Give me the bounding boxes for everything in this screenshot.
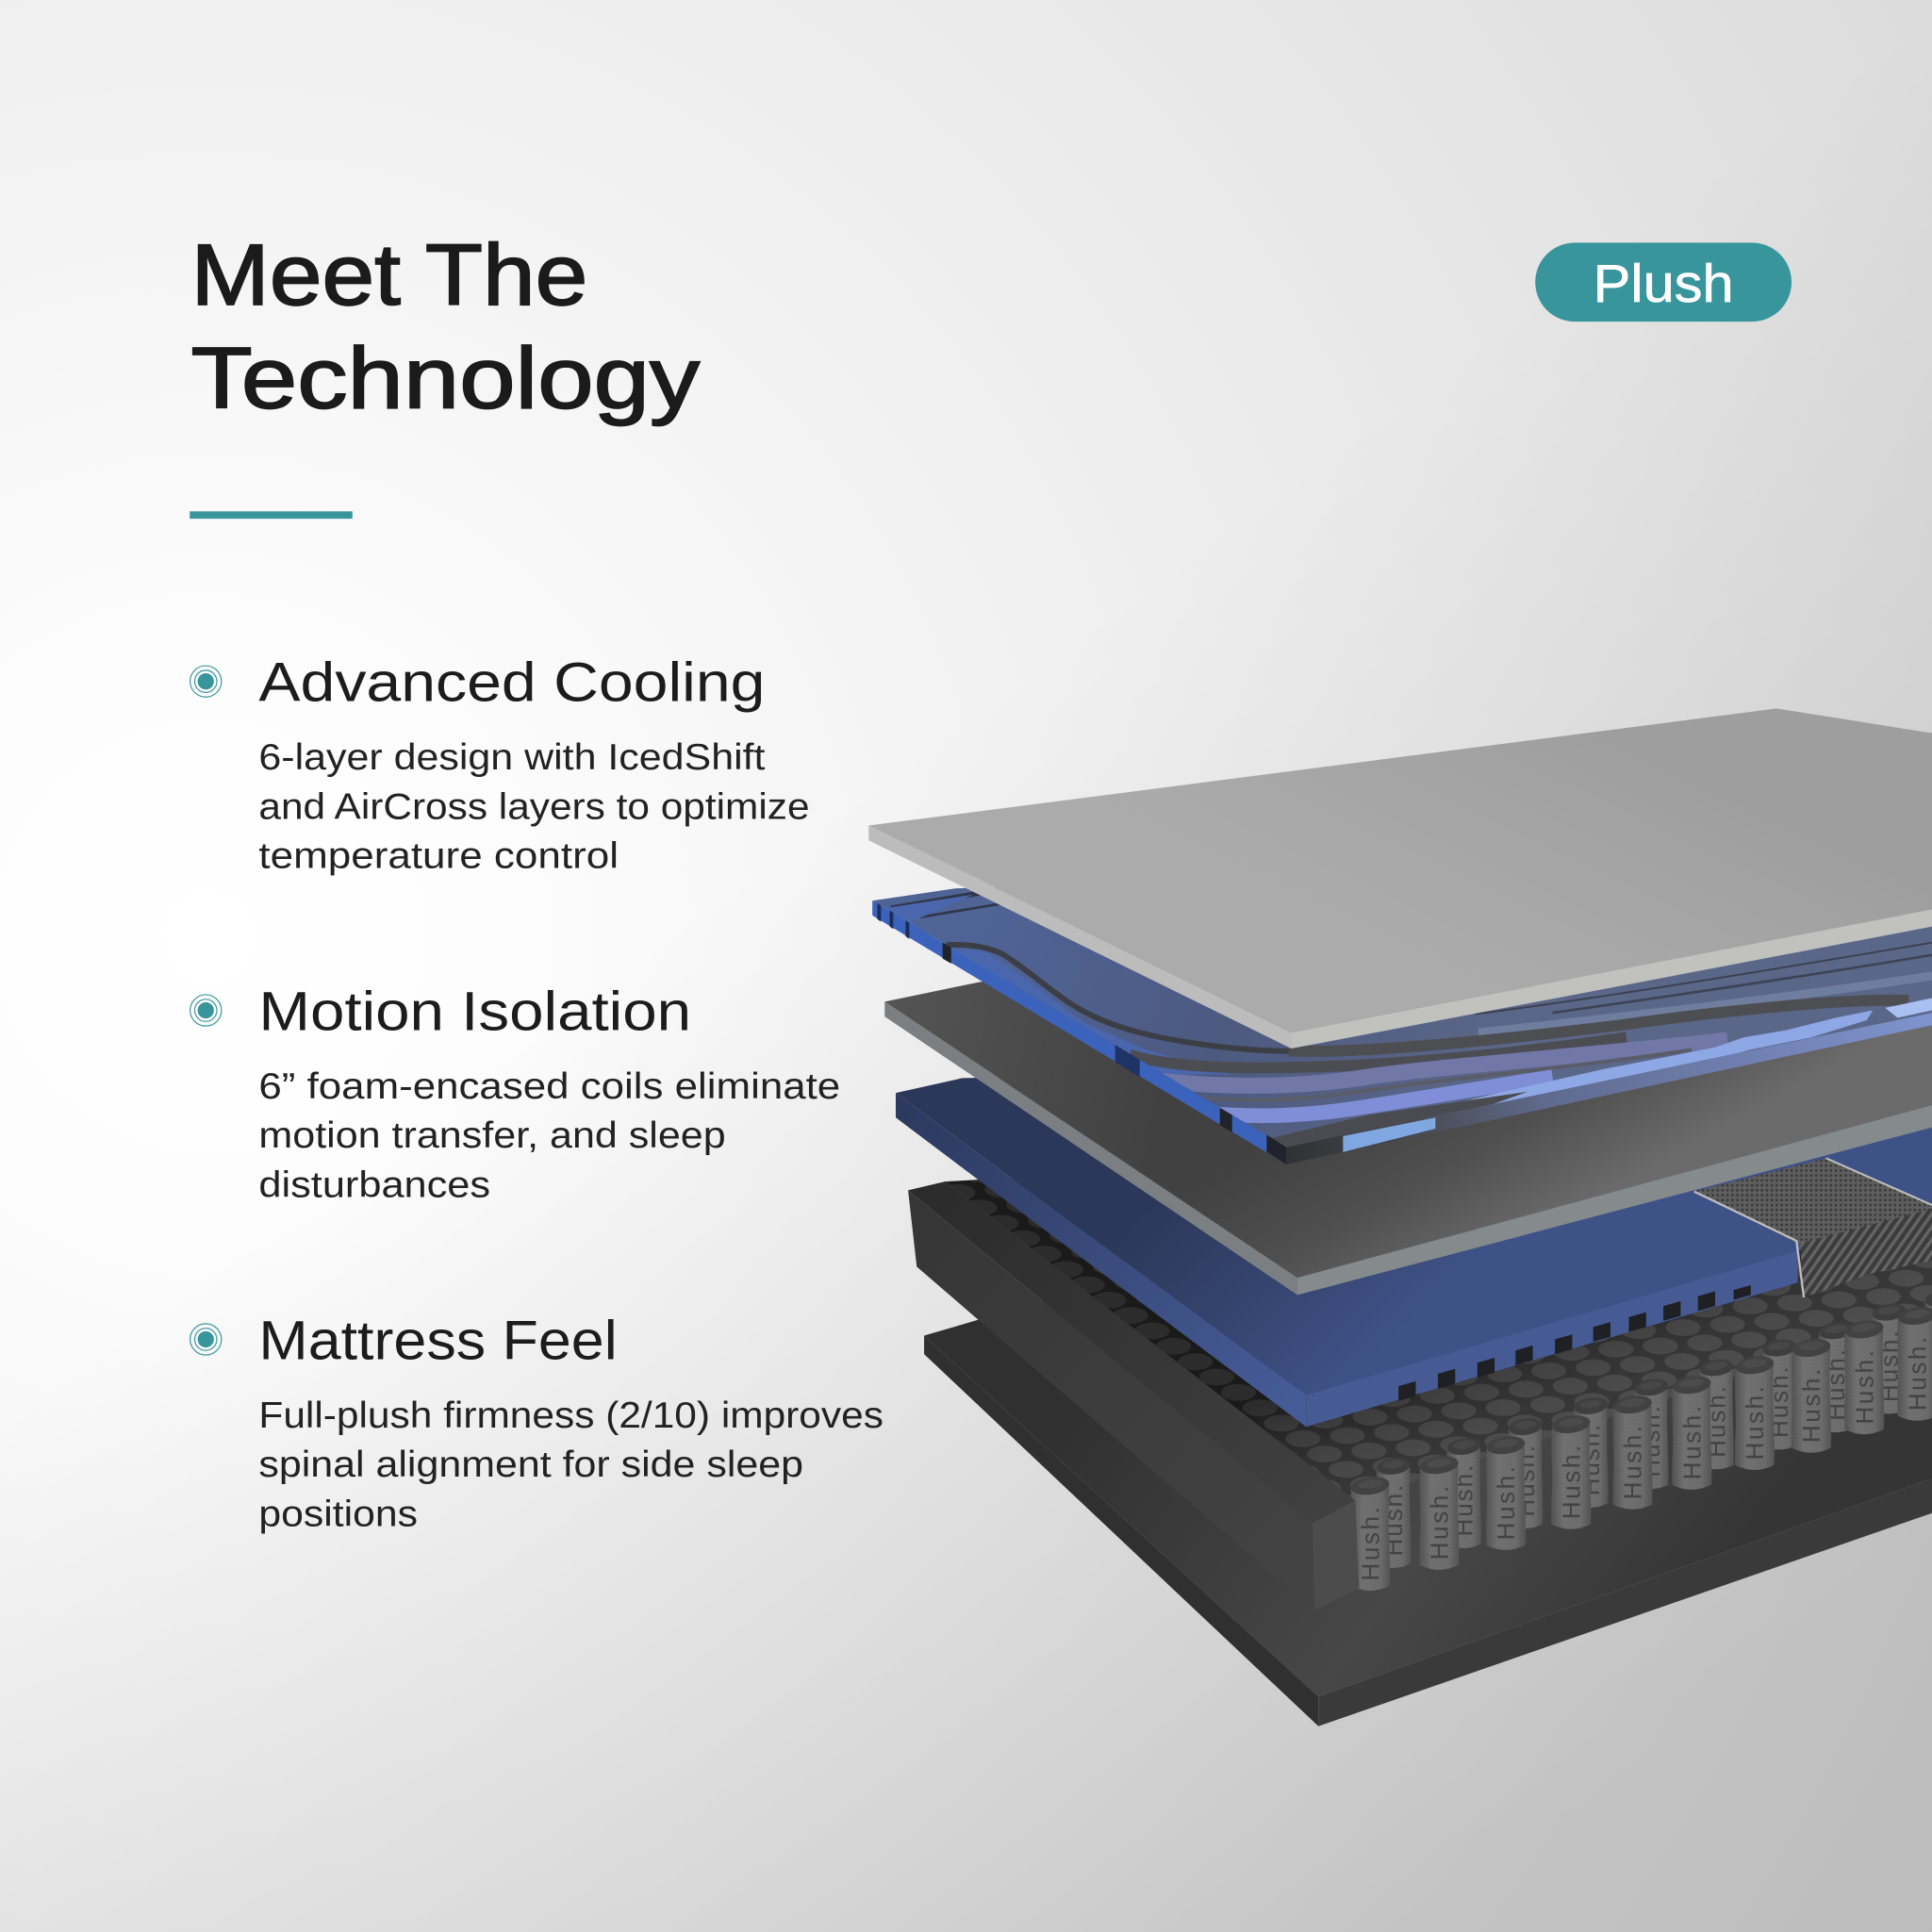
coil labels: back row: Hush. bbox=[1874, 1330, 1903, 1402]
foam notches bbox=[1398, 1285, 1751, 1401]
title underline bbox=[190, 511, 353, 519]
layer: pocket coils with Hush branding bbox=[1350, 1288, 1932, 1591]
coil labels: front row: Hush. bbox=[1619, 1426, 1647, 1499]
text: feel description: Full-plush firmness (2/10) improves bbox=[258, 1395, 883, 1436]
icon: bullet bbox=[190, 995, 222, 1026]
heading: Advanced Cooling: Advanced Cooling bbox=[258, 652, 765, 714]
coil labels: front row: Hush. bbox=[1492, 1466, 1520, 1540]
coil labels: back row: Hush. bbox=[1702, 1386, 1730, 1458]
text: cooling description: temperature control bbox=[258, 836, 619, 877]
coil labels: front row: Hush. bbox=[1850, 1350, 1878, 1425]
coil labels: front row: Hush. bbox=[1677, 1406, 1706, 1479]
icon: bullet bbox=[190, 1324, 222, 1355]
coil labels: back row bbox=[1379, 1330, 1903, 1556]
mattress exploded illustration bbox=[868, 708, 1932, 1726]
title: Meet The bbox=[191, 227, 587, 323]
layer: foam encasement frame bbox=[908, 1181, 1359, 1610]
marble left edge bbox=[872, 900, 1286, 1164]
coils: back row bbox=[1376, 1288, 1932, 1568]
layer: woven cover fabric bbox=[1694, 1158, 1932, 1297]
text: feel description bbox=[258, 1395, 883, 1534]
text: motion description: disturbances bbox=[258, 1165, 490, 1206]
text: feel description: spinal alignment for side sleep bbox=[258, 1445, 803, 1485]
coils: front row bbox=[1350, 1305, 1932, 1591]
text: motion description: motion transfer, and sleep bbox=[258, 1115, 726, 1156]
feature: Advanced Cooling bbox=[190, 652, 810, 877]
coil labels: back row: Hush. bbox=[1577, 1425, 1605, 1495]
text: cooling description: and AirCross layers to optimize bbox=[258, 786, 810, 827]
icon: bullet bbox=[190, 666, 222, 697]
layer: base foam slab bbox=[924, 1281, 1932, 1726]
marble right edge bbox=[1286, 1013, 1932, 1164]
text: motion description: 6” foam-encased coils eliminate bbox=[258, 1066, 840, 1107]
coil labels: back row: Hush. bbox=[1511, 1445, 1540, 1517]
coil labels: front row bbox=[1356, 1337, 1931, 1581]
feature: Mattress Feel bbox=[190, 1310, 883, 1534]
coil labels: front row: Hush. bbox=[1797, 1369, 1825, 1443]
coil labels: front row: Hush. bbox=[1356, 1507, 1384, 1581]
title bbox=[191, 227, 701, 427]
text: feel description: positions bbox=[258, 1494, 418, 1534]
coil labels: back row: Hush. bbox=[1637, 1406, 1665, 1478]
text: cooling description: 6-layer design with IcedShift bbox=[258, 737, 766, 778]
layer: top comfort foam bbox=[868, 708, 1932, 1049]
coil labels: back row: Hush. bbox=[1765, 1366, 1793, 1438]
text: cooling description bbox=[258, 737, 810, 877]
coil labels: back row: Hush. bbox=[1450, 1465, 1478, 1537]
feature: Motion Isolation bbox=[190, 981, 840, 1206]
title: Technology bbox=[191, 331, 701, 427]
coil labels: front row: Hush. bbox=[1741, 1386, 1769, 1461]
coil labels: front row: Hush. bbox=[1557, 1445, 1585, 1519]
heading: Mattress Feel: Mattress Feel bbox=[258, 1310, 618, 1371]
coil labels: back row: Hush. bbox=[1379, 1485, 1408, 1556]
layer: grey foam bbox=[884, 863, 1932, 1295]
heading: Motion Isolation: Motion Isolation bbox=[258, 981, 691, 1042]
layer: pocket coil tops bbox=[945, 1158, 1932, 1501]
text: motion description bbox=[258, 1066, 840, 1206]
badge: Plush bbox=[1535, 242, 1792, 322]
badge: Plush: Plush bbox=[1593, 254, 1734, 313]
coil labels: front row: Hush. bbox=[1903, 1337, 1931, 1411]
coil labels: front row: Hush. bbox=[1425, 1486, 1453, 1560]
layer: blue marbled gel foam bbox=[872, 863, 1932, 1164]
coil labels: back row: Hush. bbox=[1822, 1349, 1850, 1421]
marble swirls bbox=[877, 892, 1932, 1148]
layer: blue transition foam bbox=[896, 1060, 1932, 1427]
